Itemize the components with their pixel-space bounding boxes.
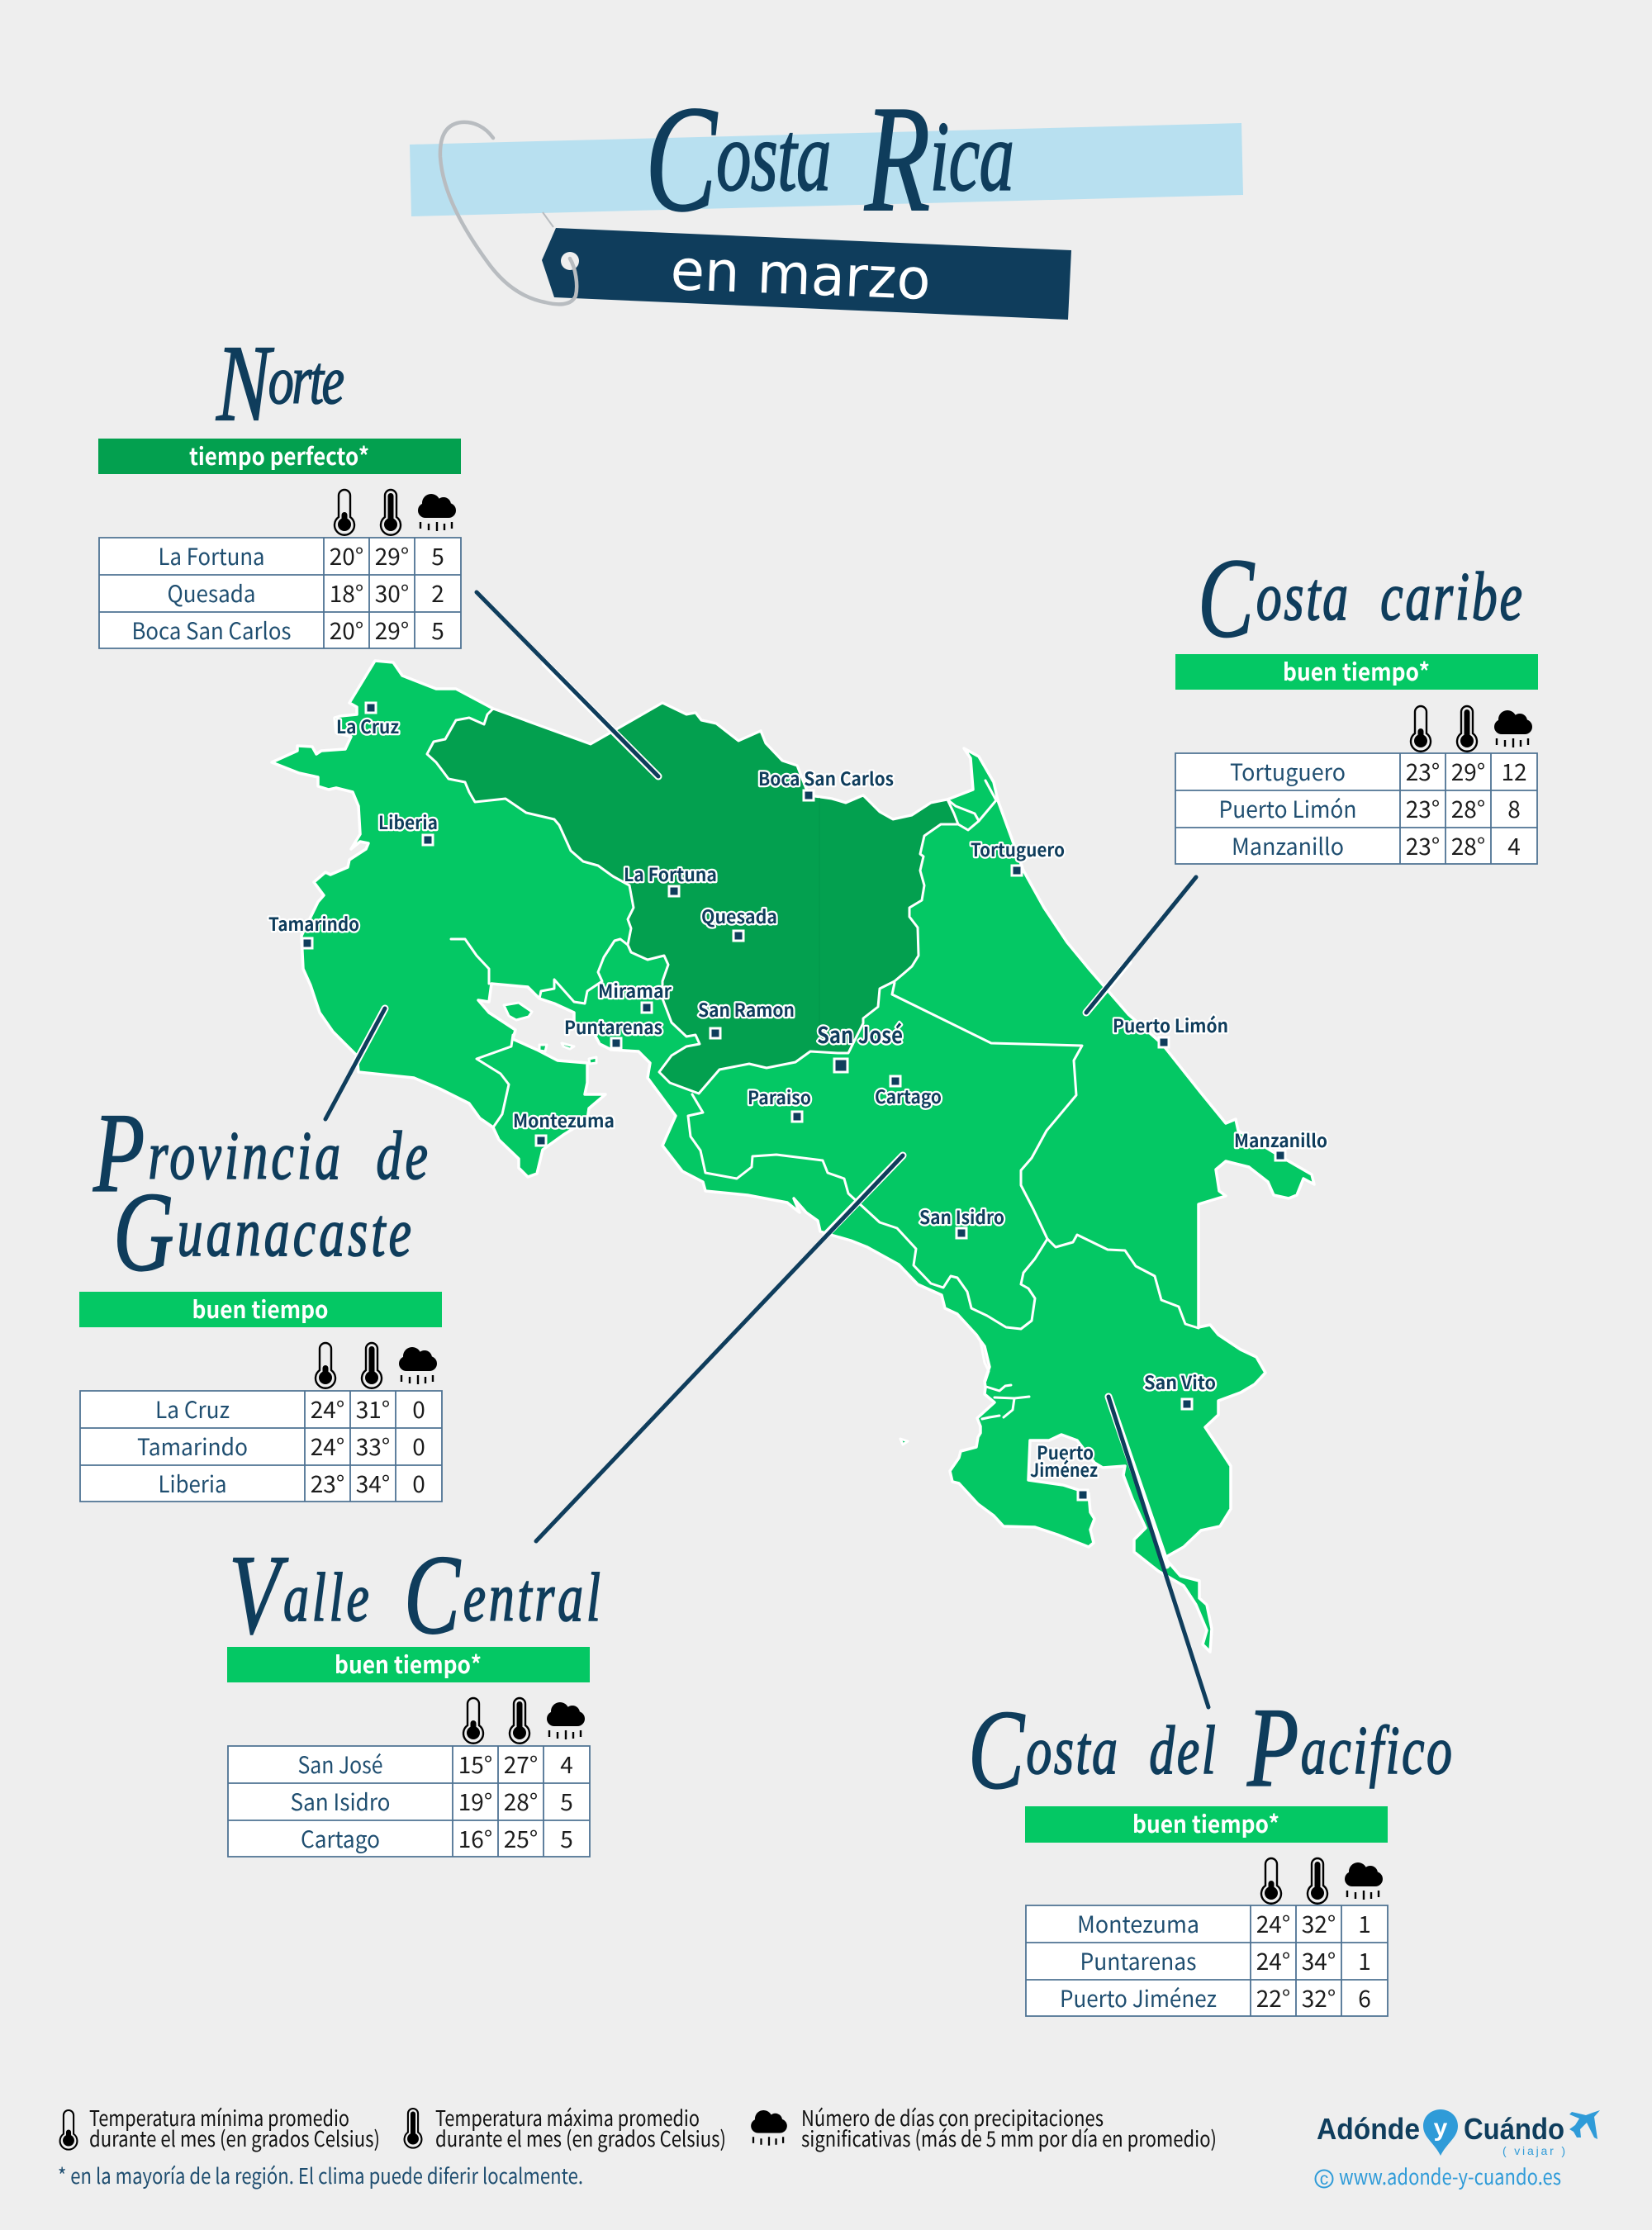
table: 5	[431, 614, 444, 647]
city labels: Tortuguero	[971, 836, 1065, 862]
islands	[504, 1003, 908, 1445]
logo word: Cuándo: Cuándo	[1464, 2112, 1564, 2146]
panel: Costa del Pacifico	[968, 1685, 1452, 2016]
land: light green regions	[272, 661, 1314, 1652]
legend: minimum temperature	[60, 2102, 380, 2153]
table: Boca San Carlos	[132, 614, 291, 647]
title banner	[410, 74, 1243, 320]
table: 24°	[1256, 1907, 1290, 1940]
rating bar: buen tiempo*	[1283, 653, 1430, 688]
table: 32°	[1302, 1981, 1336, 2014]
table: 0	[412, 1393, 425, 1426]
table: 20°	[330, 539, 363, 572]
title: ica	[930, 101, 1014, 212]
heading: Costa caribe: C	[1198, 536, 1255, 662]
table: 5	[560, 1785, 573, 1818]
leader line: Costa del Pacifico	[1108, 1397, 1208, 1707]
table	[228, 1746, 590, 1857]
table: 29°	[375, 614, 409, 647]
heading: Costa del Pacifico: osta del	[1026, 1711, 1246, 1788]
table: 0	[412, 1430, 425, 1463]
city markers	[302, 703, 1285, 1500]
city labels: San Vito	[1144, 1369, 1216, 1395]
table: 29°	[1451, 755, 1485, 788]
city labels: Cartago	[875, 1083, 942, 1109]
tag hole	[561, 252, 579, 270]
legend: rainy days	[751, 2102, 1217, 2153]
table: 23°	[1406, 792, 1440, 825]
legend: maximum temperature	[405, 2102, 726, 2153]
table: 33°	[356, 1430, 390, 1463]
legend: minimum temperature: durante el mes (en grados Celsius)	[89, 2123, 380, 2153]
region: Norte (dark green)	[427, 703, 958, 1094]
heading: Valle Central: alle	[283, 1559, 401, 1635]
column icons	[316, 1343, 437, 1388]
table: 5	[560, 1822, 573, 1855]
table: 31°	[356, 1393, 390, 1426]
table: 22°	[1256, 1981, 1290, 2014]
logo plane	[1569, 2110, 1600, 2139]
rating bar	[1025, 1805, 1388, 1843]
banner: light blue strip	[410, 123, 1243, 216]
city labels: Boca San Carlos	[758, 765, 894, 791]
rating bar: tiempo perfecto*	[189, 438, 369, 472]
table: 23°	[311, 1467, 344, 1500]
table: San José	[297, 1748, 383, 1781]
leader line: Costa caribe	[1086, 877, 1196, 1013]
city labels: Tamarindo	[268, 910, 359, 937]
table: 6	[1358, 1981, 1371, 2014]
string behind tag	[543, 212, 553, 227]
website: www.adonde-y-cuando.es	[1339, 2161, 1561, 2191]
title: R	[864, 74, 930, 244]
table: Puerto Limón	[1219, 792, 1356, 825]
table: Tortuguero	[1230, 755, 1346, 788]
table: Manzanillo	[1232, 829, 1344, 862]
leader line: Norte	[477, 592, 658, 776]
column icons	[1261, 1858, 1383, 1904]
city labels: Montezuma	[513, 1107, 615, 1133]
logo pin	[1423, 2109, 1458, 2156]
panel: Costa caribe	[1175, 536, 1538, 864]
heading: Norte: orte	[268, 341, 344, 418]
table: 5	[431, 539, 444, 572]
heading line 2: uanacaste	[178, 1193, 411, 1270]
copyright mark	[1315, 2170, 1333, 2189]
heading: Valle Central: C	[404, 1532, 461, 1658]
heading: Costa del Pacifico: C	[968, 1687, 1025, 1813]
table: La Cruz	[155, 1393, 230, 1426]
column icons	[1411, 706, 1532, 752]
city labels: La Fortuna	[624, 861, 717, 887]
city labels: Puerto Limón	[1113, 1012, 1228, 1038]
rating bar	[1175, 653, 1538, 690]
table: 8	[1507, 792, 1521, 825]
city labels: Paraiso	[748, 1084, 811, 1110]
table: 18°	[330, 576, 363, 610]
table: 24°	[1256, 1944, 1290, 1977]
table: Montezuma	[1077, 1907, 1199, 1940]
table: 12	[1501, 755, 1527, 788]
panel: Norte	[98, 323, 461, 648]
city labels: Quesada	[701, 903, 777, 929]
table: 28°	[1451, 792, 1485, 825]
rating bar: buen tiempo	[192, 1291, 329, 1326]
seam in Norte region	[819, 798, 820, 1047]
city labels	[268, 713, 1327, 1483]
table: 23°	[1406, 755, 1440, 788]
heading line 1: P	[93, 1090, 145, 1217]
table: Puerto Jiménez	[1060, 1981, 1217, 2014]
luggage tag	[542, 228, 1071, 320]
heading line 2: G	[113, 1170, 174, 1295]
table: 34°	[1302, 1944, 1336, 1977]
panel: Valle Central	[227, 1532, 601, 1857]
logo pin: y	[1434, 2114, 1448, 2142]
table: La Fortuna	[159, 539, 264, 572]
table: 1	[1358, 1944, 1371, 1977]
city labels: La Cruz	[336, 713, 399, 739]
copyright mark: c	[1320, 2170, 1328, 2189]
ring through tag hole	[440, 122, 577, 304]
rating bar	[98, 438, 461, 474]
table: 29°	[375, 539, 409, 572]
city labels: Liberia	[378, 809, 438, 835]
table	[1175, 753, 1537, 864]
city labels: San Isidro	[919, 1203, 1004, 1230]
heading: Costa del Pacifico: P	[1246, 1685, 1298, 1811]
logo word: Adónde: Adónde	[1317, 2112, 1420, 2146]
table: 24°	[311, 1393, 344, 1426]
rating bar	[79, 1291, 442, 1327]
table: 25°	[504, 1822, 538, 1855]
subtitle: en marzo	[669, 238, 932, 313]
heading: Costa caribe: osta caribe	[1256, 558, 1522, 634]
rating bar	[227, 1646, 590, 1682]
table: 30°	[375, 576, 409, 610]
column icons	[335, 490, 456, 535]
city labels: Jiménez	[1030, 1456, 1098, 1483]
table: 4	[1507, 829, 1521, 862]
footnote: * en la mayoría de la región. El clima puede diferir localmente.	[58, 2160, 583, 2190]
table: Puntarenas	[1080, 1944, 1196, 1977]
table: 34°	[356, 1467, 390, 1500]
table: Tamarindo	[137, 1430, 248, 1463]
rating bar: buen tiempo*	[1132, 1805, 1279, 1840]
table: 24°	[311, 1430, 344, 1463]
table: 19°	[458, 1785, 492, 1818]
table: 32°	[1302, 1907, 1336, 1940]
table: 20°	[330, 614, 363, 647]
logo tagline: ( viajar )	[1502, 2144, 1565, 2157]
table: 2	[431, 576, 444, 610]
heading: Valle Central: entral	[463, 1559, 601, 1635]
table: 16°	[458, 1822, 492, 1855]
title: C	[645, 74, 718, 244]
heading line 1: rovincia de	[148, 1117, 428, 1193]
city labels: Puerto	[1037, 1439, 1094, 1465]
column icons	[463, 1698, 585, 1744]
table: Cartago	[301, 1822, 380, 1855]
city labels: San Ramon	[698, 996, 795, 1022]
legend: rainy days: Número de días con precipitaciones	[801, 2102, 1104, 2133]
legend: maximum temperature: durante el mes (en grados Celsius)	[435, 2123, 726, 2153]
city labels: Miramar	[598, 977, 672, 1004]
map of Costa Rica	[268, 592, 1327, 1707]
logo: Adónde y Cuándo	[1315, 2109, 1600, 2191]
table: 4	[560, 1748, 573, 1781]
internal region borders	[451, 780, 1199, 1419]
panel: Provincia de Guanacaste	[79, 1090, 442, 1502]
table	[80, 1391, 442, 1502]
table	[99, 538, 461, 648]
leader line: Valle Central	[536, 1155, 903, 1541]
table: Quesada	[167, 576, 256, 610]
table: 0	[412, 1467, 425, 1500]
rating bar: buen tiempo*	[335, 1646, 482, 1681]
table: 1	[1358, 1907, 1371, 1940]
city labels: Puntarenas	[564, 1013, 662, 1040]
legend: maximum temperature: Temperatura máxima promedio	[435, 2102, 700, 2133]
heading: Costa del Pacifico: acifico	[1301, 1711, 1452, 1788]
legend: minimum temperature: Temperatura mínima promedio	[89, 2102, 349, 2133]
title: osta	[716, 101, 866, 212]
leader line: Guanacaste	[325, 1008, 385, 1119]
table: 15°	[458, 1748, 492, 1781]
table: 23°	[1406, 829, 1440, 862]
table: 27°	[504, 1748, 538, 1781]
legend	[58, 2102, 1217, 2190]
legend: rainy days: significativas (más de 5 mm por día en promedio)	[801, 2123, 1217, 2153]
heading: Norte: N	[216, 323, 275, 444]
table: Liberia	[159, 1467, 226, 1500]
table: 28°	[1451, 829, 1485, 862]
city labels: Manzanillo	[1234, 1127, 1327, 1153]
heading: Valle Central: V	[229, 1532, 288, 1658]
table: San Isidro	[291, 1785, 390, 1818]
table: 28°	[504, 1785, 538, 1818]
table	[1026, 1905, 1388, 2016]
city labels: San José	[817, 1018, 903, 1050]
